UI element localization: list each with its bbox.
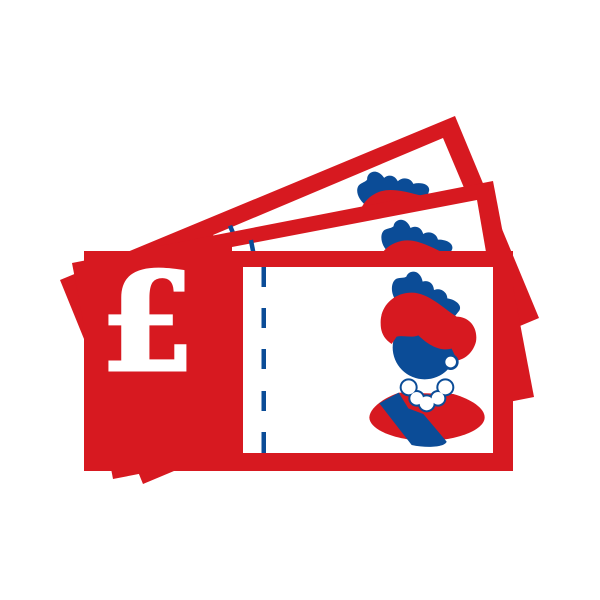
head (393, 315, 457, 379)
front note window (243, 267, 493, 453)
earring (444, 355, 457, 369)
sash (379, 393, 447, 447)
necklace (400, 378, 454, 412)
crown (392, 272, 460, 316)
middle note queen crown (367, 208, 478, 313)
back banknote (60, 116, 539, 484)
hat and hair (381, 293, 476, 361)
queen portrait (369, 272, 485, 447)
body (369, 393, 485, 441)
middle note dashed line (249, 240, 256, 254)
back note dashed line (228, 225, 241, 247)
front banknote (84, 243, 513, 471)
pound sign: £ (100, 243, 195, 403)
middle banknote (72, 181, 534, 479)
front note dashed line (262, 267, 266, 453)
back note queen crown (341, 148, 464, 266)
